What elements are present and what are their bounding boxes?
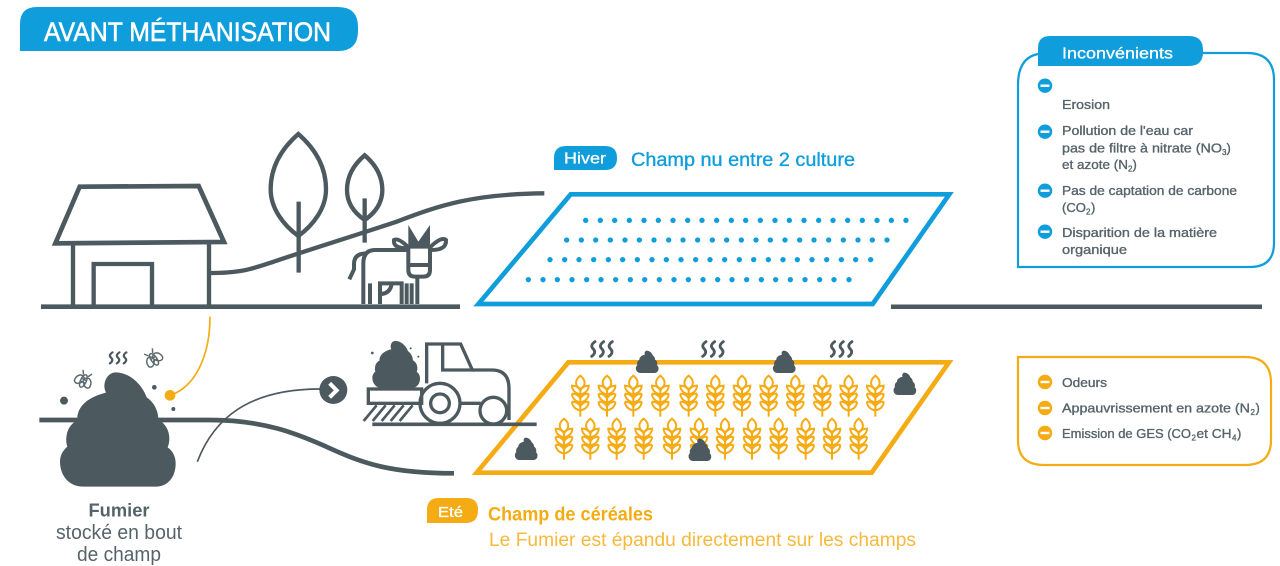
- list text: (CO: [1062, 200, 1086, 215]
- ground line: [41, 300, 460, 314]
- manure piles on field: [515, 351, 916, 461]
- list text: organique: [1062, 242, 1127, 257]
- list text: Appauvrissement en azote (N: [1062, 400, 1250, 416]
- wheat rows: [556, 376, 884, 460]
- winter label: [554, 146, 855, 171]
- orange connector: [165, 317, 210, 401]
- list text: Pollution de l'eau car: [1062, 123, 1194, 138]
- list text: ): [1237, 426, 1241, 441]
- manure scene and tractor: [39, 317, 537, 487]
- summer field with wheat: [477, 342, 949, 473]
- manure caption: stocké en bout: [56, 522, 182, 544]
- panel: inconvénients été: [1018, 357, 1271, 465]
- winter field with dots: [478, 194, 949, 304]
- list text: ): [1132, 157, 1137, 172]
- hill curve: [209, 193, 544, 273]
- list text: Erosion: [1062, 97, 1110, 112]
- manure caption: Fumier: [88, 500, 150, 520]
- heading tab: Inconvénients: [1062, 46, 1173, 62]
- tree small: [347, 155, 382, 243]
- list text: 2: [1128, 164, 1133, 174]
- bullets: [1038, 375, 1052, 440]
- list text: Odeurs: [1062, 375, 1108, 390]
- list text: 2: [1086, 208, 1091, 216]
- list text: et azote (N: [1062, 157, 1128, 172]
- road curve: [39, 420, 454, 473]
- list text: [1062, 375, 1260, 442]
- summer label: [427, 498, 916, 551]
- summer label: Le Fumier est épandu directement sur les champs: [489, 530, 916, 551]
- list text: [1062, 97, 1237, 257]
- summer label: Champ de céréales: [488, 504, 653, 526]
- list text: 3: [1222, 148, 1227, 157]
- title: AVANT MÉTHANISATION: [44, 17, 331, 47]
- winter label: Hiver: [564, 150, 607, 168]
- panel: inconvénients hiver: [1018, 36, 1274, 267]
- tractor: [364, 341, 537, 424]
- winter label: Champ nu entre 2 culture: [631, 150, 855, 171]
- bullets: [1038, 78, 1052, 239]
- tree large: [271, 134, 326, 273]
- summer label: Eté: [438, 504, 463, 521]
- right ground line: [891, 304, 1262, 309]
- list text: ): [1256, 400, 1260, 416]
- steam: [592, 342, 852, 356]
- list text: ): [1091, 200, 1095, 215]
- cow: [349, 225, 446, 304]
- heading tab: [1038, 36, 1203, 66]
- list text: et CH: [1196, 426, 1232, 441]
- list text: ): [1226, 140, 1231, 156]
- list text: Disparition de la matière: [1062, 225, 1217, 240]
- farm scene: house, trees, hill, cow: [41, 134, 544, 307]
- smell: [110, 352, 126, 363]
- flies: [73, 346, 165, 391]
- manure caption: [56, 500, 182, 566]
- house: [55, 186, 224, 305]
- list text: 2: [1192, 434, 1196, 442]
- particles: [60, 385, 175, 411]
- manure pile: [60, 372, 176, 487]
- list text: pas de filtre à nitrate (NO: [1062, 140, 1222, 156]
- list text: 4: [1232, 434, 1237, 442]
- list text: Emission de GES (CO: [1062, 426, 1191, 441]
- arrow arc: [197, 376, 347, 462]
- list text: 2: [1250, 408, 1256, 417]
- title: [20, 7, 358, 51]
- manure caption: de champ: [77, 544, 161, 566]
- list text: Pas de captation de carbone: [1062, 183, 1237, 198]
